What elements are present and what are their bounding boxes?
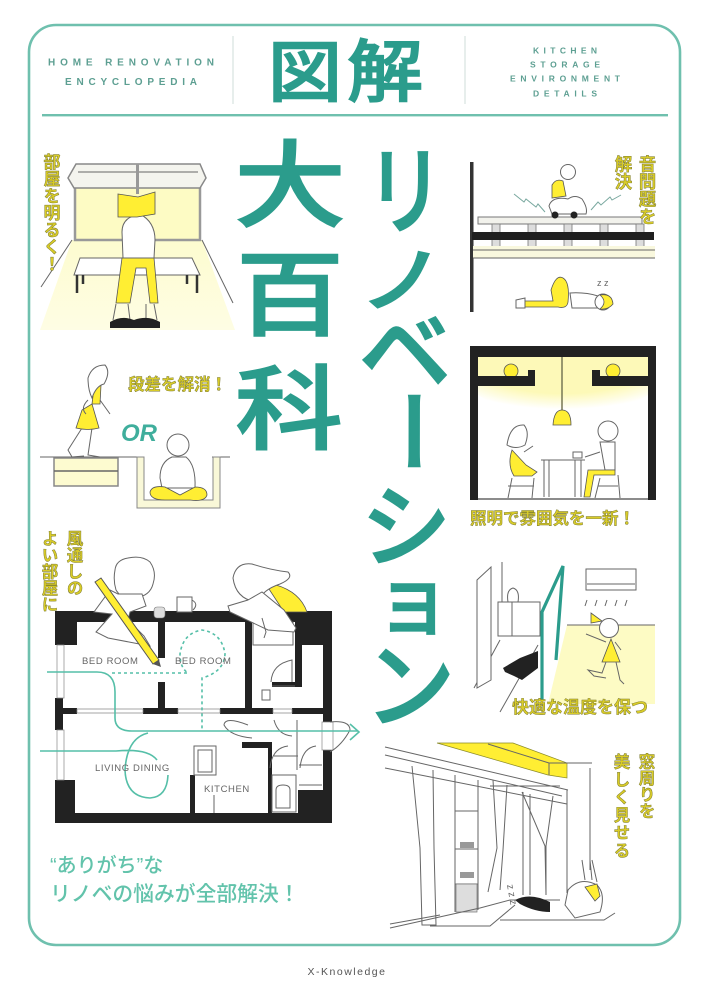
title: リノベーション: シ <box>361 479 451 579</box>
header divider right <box>464 36 466 104</box>
English series title: ENCYCLOPEDIA <box>65 77 197 88</box>
English topics list: DETAILS <box>533 88 597 98</box>
middle wall <box>60 708 323 714</box>
title: リノベーション: ョ <box>375 556 451 646</box>
title: 大百科: 大 <box>234 133 346 239</box>
floor edges <box>390 900 615 928</box>
illustration: bright room <box>40 164 235 330</box>
woman seated <box>507 425 527 448</box>
mug and cup <box>154 597 196 618</box>
lights <box>504 364 518 378</box>
floor line <box>40 456 230 458</box>
label: 段差を解消！: 段差を解消！ <box>128 375 227 394</box>
room frame <box>470 346 656 500</box>
room labels: LIVING DINING <box>95 763 170 774</box>
title: リノベーション: ノ <box>359 240 445 321</box>
sleep marks: z z z <box>504 884 518 906</box>
title: リノベーション: リ <box>366 138 444 247</box>
English topics list <box>510 46 621 98</box>
air conditioner <box>586 569 636 590</box>
cove shelves <box>478 370 648 386</box>
label: 風通しのよい部屋に: 風通しの <box>64 530 83 596</box>
English series title <box>48 58 214 88</box>
sitting person <box>167 434 189 456</box>
title: 大百科: 百 <box>236 245 344 348</box>
header band <box>42 35 668 116</box>
curtains <box>412 766 560 925</box>
label: 音問題を解決: 解決 <box>613 155 633 191</box>
ceiling glow <box>478 357 648 422</box>
label: 風通しのよい部屋に <box>39 530 83 612</box>
entrance door gap <box>322 722 333 750</box>
table <box>541 460 585 497</box>
black cat <box>503 651 538 680</box>
title: 図解: 解 <box>347 35 423 111</box>
curtain rail <box>68 164 206 188</box>
title: リノベーション: ベ <box>359 303 451 405</box>
label: 風通しのよい部屋に: よい部屋に <box>39 530 58 612</box>
illustration: curtains and window <box>385 743 615 928</box>
dashed airflow <box>112 630 225 730</box>
English topics list: STORAGE <box>530 60 600 70</box>
floor light <box>40 240 235 330</box>
label: 照明で雰囲気を一新！: 照明で雰囲気を一新！ <box>470 509 635 528</box>
yellow skylight <box>437 743 567 778</box>
tagline: リノベの悩みが全部解決！ <box>50 883 300 906</box>
label: 音問題を解決: 音問題を <box>637 154 657 225</box>
door <box>477 567 491 688</box>
English topics list: ENVIRONMENT <box>510 74 621 84</box>
English topics list: KITCHEN <box>533 46 597 56</box>
title: リノベーション <box>356 138 456 740</box>
room labels <box>82 656 250 795</box>
ceiling layers <box>473 246 655 258</box>
black cat <box>515 896 550 912</box>
publisher: X-Knowledge <box>308 966 386 978</box>
window <box>75 180 200 240</box>
bench <box>74 258 200 275</box>
room labels: KITCHEN <box>204 784 250 795</box>
reading person <box>116 258 158 303</box>
illustration: soundproof floor <box>470 162 655 312</box>
plant vase <box>508 588 518 602</box>
cabinet <box>498 602 540 636</box>
window panels <box>57 645 292 780</box>
illustration: sunken seating or step <box>40 365 230 508</box>
tagline: “ありがち”な <box>50 854 163 877</box>
floor finish <box>478 217 642 224</box>
label: 窓周りを美しく見せる <box>611 753 655 860</box>
header divider left <box>232 36 234 104</box>
person with pencil <box>94 557 161 667</box>
floor <box>478 498 648 500</box>
label: 部屋を明るく！: 部屋を明るく！ <box>40 153 60 272</box>
girl with flag <box>591 613 602 623</box>
OR text: OR <box>121 420 158 447</box>
walking woman <box>68 428 100 457</box>
illustration: lighting room <box>470 346 656 500</box>
wall <box>470 162 474 312</box>
lying person <box>582 860 597 882</box>
joist supports <box>492 224 644 254</box>
man seated <box>598 421 618 441</box>
floor lines <box>474 562 655 712</box>
door swings <box>224 660 350 768</box>
room labels: BED ROOM <box>82 656 139 667</box>
teal door panel <box>542 566 563 700</box>
pendant lamp <box>561 357 563 410</box>
label: 快適な温度を保つ: 快適な温度を保つ <box>512 698 648 717</box>
label: 窓周りを美しく見せる: 美しく見せる <box>611 753 630 860</box>
teal airflow lines <box>40 672 359 798</box>
black slab <box>472 232 654 240</box>
outer and inner walls <box>55 611 332 823</box>
title: 図解 <box>268 35 423 111</box>
kitchen counter <box>194 746 216 813</box>
title: 大百科 <box>234 133 346 462</box>
sleep marks: z z <box>597 278 609 288</box>
noise marks <box>514 194 621 212</box>
warm floor <box>548 625 655 704</box>
child on toy car <box>549 196 586 214</box>
header rule <box>42 114 668 116</box>
open book <box>118 192 155 217</box>
title: 大百科: 科 <box>235 360 343 462</box>
title: リノベーション: ン <box>365 634 455 740</box>
illustration: temperature control <box>474 562 655 712</box>
floor plan <box>40 557 359 823</box>
tagline <box>50 854 300 906</box>
sunken pit <box>137 457 220 508</box>
toilet <box>276 785 290 808</box>
label: 窓周りを美しく見せる: 窓周りを <box>636 753 655 819</box>
room labels: BED ROOM <box>175 656 232 667</box>
title: 図解: 図 <box>268 35 342 110</box>
English series title: HOME RENOVATION <box>48 58 214 68</box>
raised storage <box>54 458 118 486</box>
sleeping person <box>525 277 568 307</box>
label: 音問題を解決 <box>613 154 657 225</box>
person leaning on plan <box>228 564 307 645</box>
shelving <box>455 775 478 912</box>
title: リノベーション: ー <box>356 387 456 477</box>
right wall edge <box>567 768 590 893</box>
ceiling lines <box>385 747 568 804</box>
flush room <box>255 622 322 812</box>
